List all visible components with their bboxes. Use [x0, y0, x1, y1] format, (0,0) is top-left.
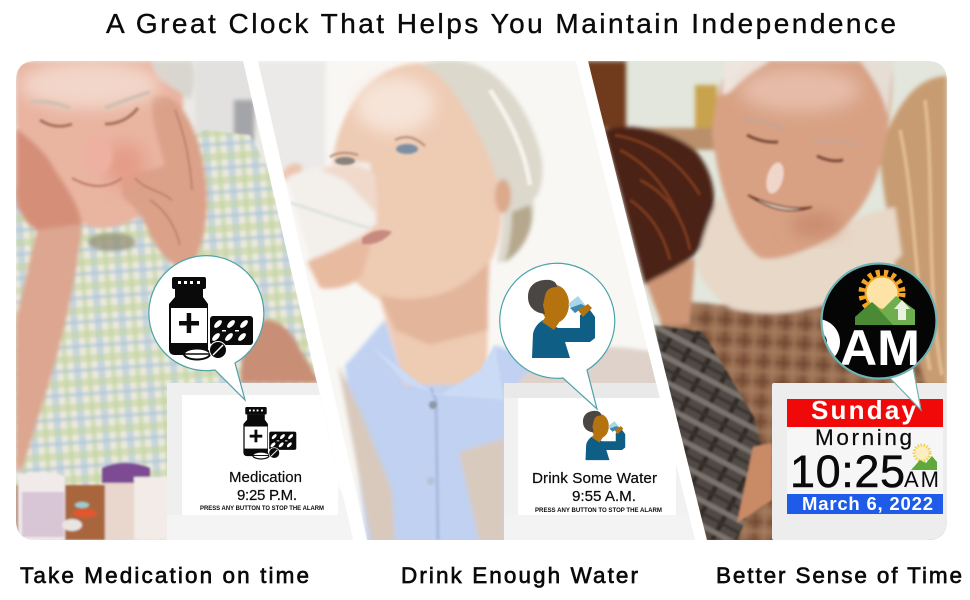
- title: A Great Clock That Helps You Maintain Independence: [106, 8, 896, 39]
- medication alarm text: [200, 469, 324, 512]
- callout: water bubble: [500, 263, 615, 409]
- icon: small sunrise: [911, 445, 937, 470]
- water alarm text: PRESS ANY BUTTON TO STOP THE ALARM: [535, 508, 662, 514]
- callout: morning AM bubble: [820, 262, 938, 412]
- panel: better sense of time photo: [586, 61, 952, 545]
- icon: small drinking person: [583, 411, 625, 460]
- water alarm text: Drink Some Water: [532, 470, 657, 487]
- panel: take medication photo: [16, 61, 357, 541]
- panel: drink water photo: [256, 60, 704, 545]
- clock text: Morning: Morning: [815, 425, 912, 450]
- caption: drink water: Drink Enough Water: [401, 563, 638, 588]
- clock text: time: 10:25: [790, 446, 905, 497]
- device: digital clock frame: [772, 383, 952, 540]
- callout: medication bubble: [149, 256, 264, 400]
- device: medication alarm: [167, 383, 357, 540]
- clock zoom text: AM: AM: [840, 320, 920, 376]
- caption: sense of time: Better Sense of Time: [716, 563, 962, 588]
- medication alarm text: 9:25 P.M.: [237, 487, 297, 504]
- red day band: [787, 399, 943, 427]
- water alarm text: [532, 470, 662, 514]
- clock text: Sunday: Sunday: [811, 395, 917, 425]
- icon: drinking person: [528, 280, 595, 358]
- water alarm text: 9:55 A.M.: [572, 488, 636, 505]
- blue date band: [787, 494, 943, 514]
- caption: take medication: Take Medication on time: [20, 563, 309, 588]
- medication alarm text: PRESS ANY BUTTON TO STOP THE ALARM: [200, 506, 324, 512]
- medication alarm text: Medication: [229, 469, 302, 486]
- device: water alarm: [504, 383, 704, 540]
- clock text: AM: AM: [904, 467, 939, 492]
- icon: small medication: [243, 407, 296, 459]
- icon: medication bottle and pills: [169, 277, 253, 360]
- clock text: date: March 6, 2022: [802, 493, 933, 514]
